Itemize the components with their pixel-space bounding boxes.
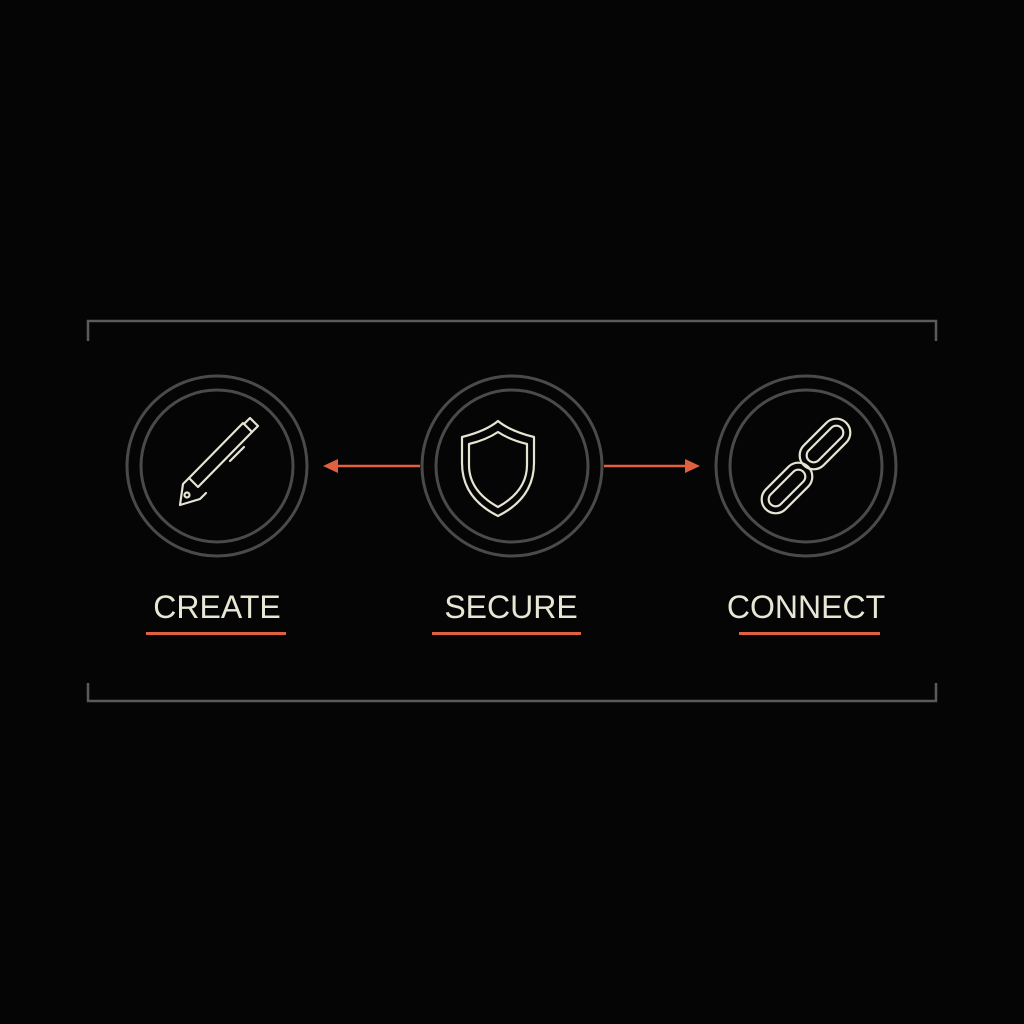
frame (88, 321, 936, 701)
icon: shield (462, 421, 534, 516)
icon: pen (180, 418, 258, 505)
step: connect (716, 376, 896, 635)
underline: secure (432, 632, 581, 635)
label: connect: CONNECT (727, 589, 885, 625)
label: secure: SECURE (444, 589, 578, 625)
step: create (127, 376, 307, 635)
underline: connect (739, 632, 880, 635)
arrow: left (323, 459, 420, 473)
label: create: CREATE (153, 589, 281, 625)
icon ring: create (127, 376, 307, 556)
underline: create (146, 632, 286, 635)
arrow: right (604, 459, 700, 473)
icon ring: secure (422, 376, 602, 556)
icon ring: connect (716, 376, 896, 556)
step: secure (422, 376, 602, 635)
icon: chain link (756, 413, 856, 519)
